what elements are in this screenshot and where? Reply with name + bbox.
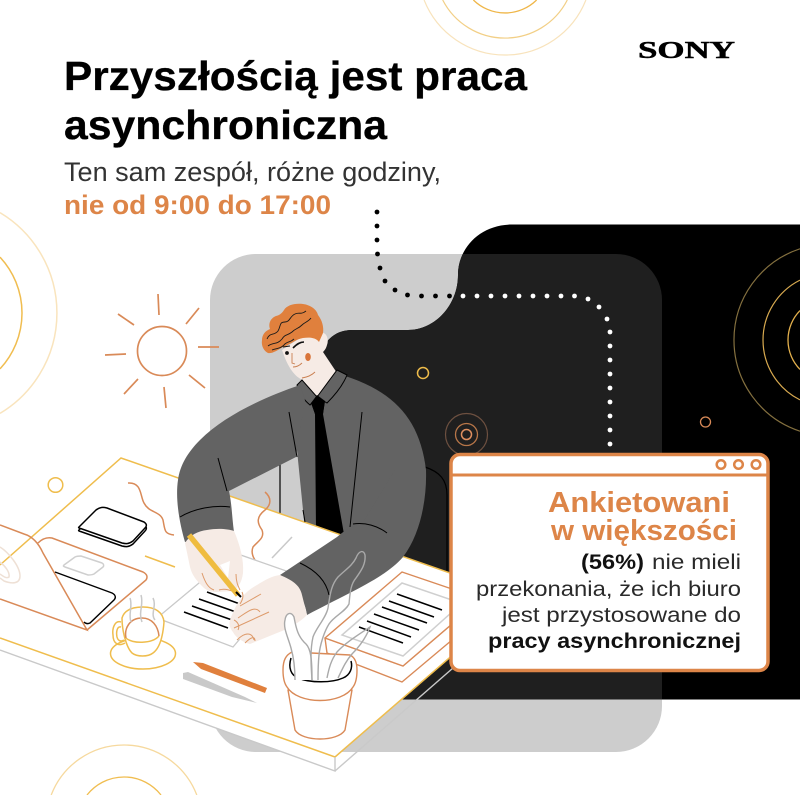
man: collar [297, 370, 347, 405]
small dashes on desk [145, 556, 175, 567]
icon: coffee cup [110, 595, 176, 669]
desk [0, 458, 470, 771]
window body text: jest przystosowane do [501, 603, 741, 627]
title: Przyszłością jest praca [64, 53, 528, 99]
window body text: nie mieli [652, 550, 741, 574]
subtitle: nie od 9:00 do 17:00 [64, 190, 331, 220]
man: right arm [280, 412, 426, 615]
plant leaves [285, 552, 370, 680]
window heading: Ankietowani [548, 487, 730, 519]
book with document [325, 572, 452, 682]
icon: orange pencil on desk [193, 662, 267, 693]
window body text: pracy asynchronicznej [488, 629, 741, 653]
left hand holding pencil [185, 529, 243, 592]
window body text: przekonania, że ich biuro [476, 577, 741, 601]
right hand [229, 575, 307, 644]
icon: paper clip rings [0, 547, 20, 583]
man: torso [295, 376, 426, 550]
dotted connector path [375, 210, 612, 446]
icon: pencil [189, 535, 241, 597]
paper with text lines [157, 553, 295, 647]
background: grey rounded panel [210, 254, 662, 752]
icon: plant pot [283, 552, 370, 739]
window heading: w większości [550, 515, 737, 547]
chair [280, 463, 447, 575]
small ring: orange [700, 417, 710, 427]
window buttons [717, 460, 760, 469]
window body text [476, 550, 741, 653]
grey dash on desk [272, 537, 292, 558]
logo: SONY: SONY [638, 38, 735, 64]
man: tie [311, 394, 345, 540]
icon: squiggles [128, 483, 270, 560]
background: black blob panel [323, 224, 800, 700]
title [64, 53, 528, 148]
target rings icon [446, 414, 488, 456]
icon: laptop [0, 525, 147, 630]
small ring: yellow [418, 368, 428, 378]
icon: phone [79, 507, 146, 547]
icon: grey pencil on desk [183, 672, 257, 703]
window heading [548, 487, 737, 547]
icon: sun [105, 294, 219, 408]
decorative rings: top [424, 0, 586, 55]
text window panel [451, 454, 768, 670]
man: tie knot [311, 395, 325, 414]
man: head and neck [262, 304, 346, 405]
decorative rings: left [0, 213, 57, 413]
decorative rings: bottom [51, 745, 197, 795]
title: asynchroniczna [64, 102, 388, 148]
hair [262, 304, 323, 353]
subtitle: Ten sam zespół, różne godziny, [64, 157, 441, 187]
man: chair strut [303, 510, 305, 522]
window body text: (56%) [581, 550, 644, 574]
decorative rings: right [734, 249, 800, 431]
icon: yellow circle [48, 478, 63, 492]
man: left arm [177, 385, 305, 542]
subtitle [64, 157, 441, 220]
